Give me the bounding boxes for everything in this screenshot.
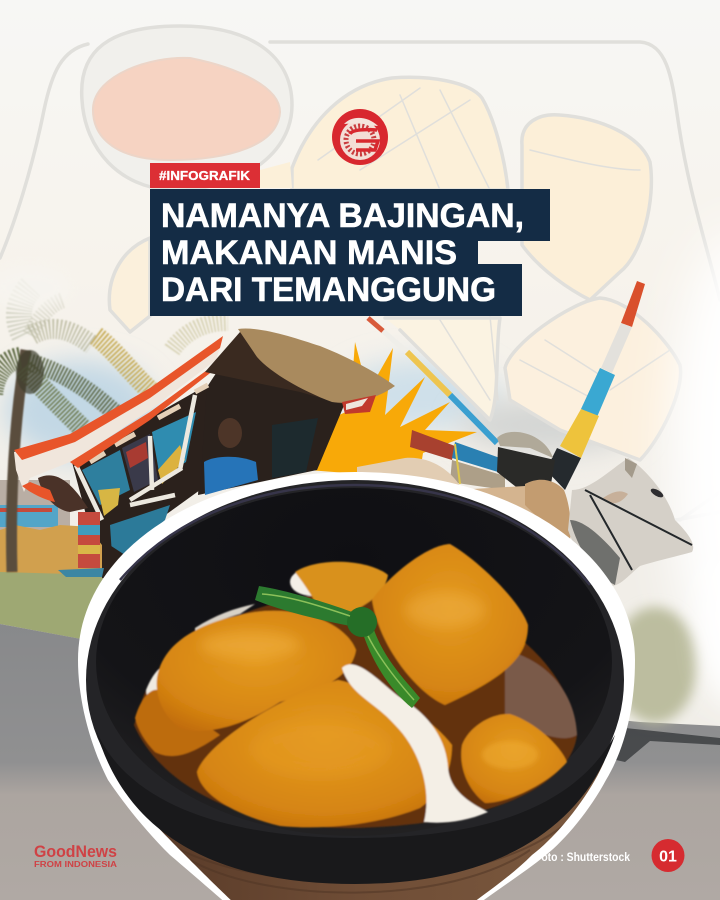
right pole	[621, 281, 645, 327]
title block: DARI TEMANGGUNG	[161, 271, 496, 309]
piece far left	[135, 690, 220, 756]
coconut milk	[342, 664, 488, 823]
title block: NAMANYA BAJINGAN,	[161, 197, 524, 235]
page number badge: 01	[659, 848, 677, 866]
white haze over right edge	[670, 230, 720, 690]
logo emblem	[332, 109, 388, 165]
piece right	[372, 544, 528, 705]
decorative pillar	[78, 512, 100, 568]
tan bull body behind	[357, 458, 460, 486]
food contents	[134, 544, 577, 828]
pandan leaf knot	[255, 586, 420, 708]
illustration: orange burst	[308, 342, 477, 474]
white cut-out	[78, 472, 635, 900]
hashtag badge: #INFOGRAFIK	[159, 169, 250, 183]
dark roof slats	[205, 332, 392, 405]
sweet potato pieces	[109, 77, 681, 460]
title block: MAKANAN MANIS	[161, 234, 457, 272]
food photo: bowl with white cut-out border	[78, 472, 635, 900]
yoke	[410, 430, 455, 460]
GoodNews logo text: GoodNews	[34, 843, 117, 861]
coconut milk back	[290, 568, 334, 596]
photo: ground left	[0, 480, 140, 650]
photo: yoke pole and bulls	[357, 281, 693, 586]
piece bottom	[197, 680, 452, 827]
illustration: line-art food tray	[0, 26, 720, 522]
photo: road and right grass	[0, 545, 720, 900]
wheel cover	[38, 475, 88, 512]
photo: palm trees	[0, 266, 228, 572]
highlights on pieces	[405, 592, 485, 628]
piece left	[157, 611, 356, 731]
orange-white roof trim	[14, 338, 223, 492]
syrup	[134, 590, 577, 828]
tray outline	[0, 42, 720, 522]
bowl interior	[96, 488, 612, 836]
title block	[150, 189, 550, 316]
GoodNews logo text	[34, 843, 117, 869]
white bull	[568, 458, 693, 586]
sauce dish	[82, 26, 292, 190]
photo: bull cart	[14, 329, 395, 580]
panel lower	[110, 505, 170, 555]
photo credit: Foto : Shutterstock	[535, 850, 630, 864]
small brown bull	[525, 480, 571, 540]
bowl rim	[86, 480, 624, 880]
piece back	[295, 562, 388, 620]
cab interior	[198, 340, 345, 495]
carriage body	[72, 385, 207, 555]
left blue yellow pole	[368, 318, 383, 331]
hashtag badge	[150, 163, 260, 188]
person	[204, 418, 258, 495]
page number badge	[652, 839, 684, 872]
clay base	[158, 760, 605, 900]
GoodNews logo text: FROM INDONESIA	[34, 860, 117, 869]
piece lower right	[461, 714, 567, 803]
burlap roof cover	[238, 329, 395, 403]
bull hump far	[497, 432, 553, 458]
